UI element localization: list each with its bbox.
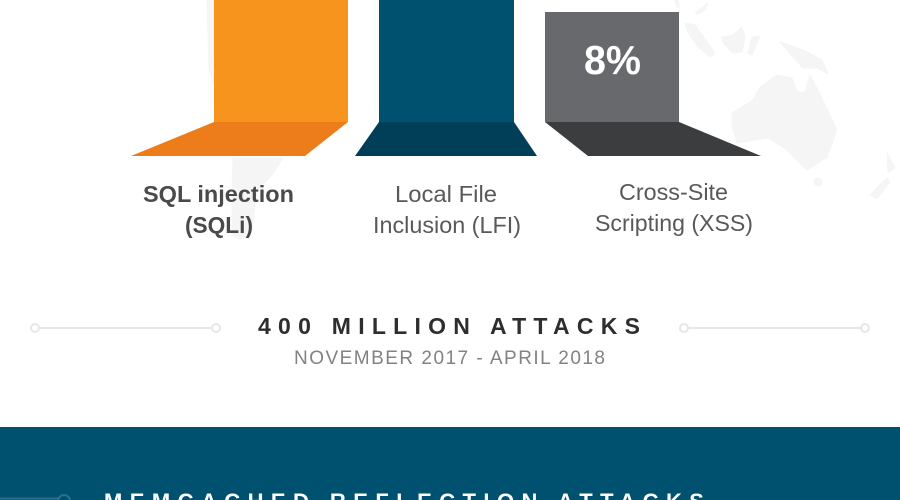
bar: Local File Inclusion [355,0,537,156]
label: Local File Inclusion: Inclusion (LFI) [373,212,521,238]
value: 8%: 8% [584,37,641,83]
heading: 400 million attacks: 400 MILLION ATTACKS [258,313,640,339]
connector icon [0,495,70,500]
background world map [207,0,895,240]
panel background [0,427,900,500]
panel: memcached section [0,427,900,500]
label: Cross-Site Scripting: Cross-Site [619,179,728,205]
label: Local File Inclusion: Local File [395,181,497,207]
label: SQL injection: SQL injection [143,181,294,207]
divider: right [680,324,869,332]
date range: NOVEMBER 2017 - APRIL 2018 [294,348,605,369]
bar face: SQL injection [214,0,348,122]
label: SQL injection: (SQLi) [185,212,253,238]
label: Local File Inclusion [373,181,521,238]
label: SQL injection [143,181,294,238]
label: Cross-Site Scripting [595,179,753,236]
divider: left [31,324,220,332]
label: Cross-Site Scripting: Scripting (XSS) [595,210,753,236]
bar floor: Local File Inclusion [355,122,537,156]
bar floor: SQL injection [131,122,348,156]
bar face: Cross-Site Scripting [545,12,679,122]
bar floor: Cross-Site Scripting [545,122,761,156]
bar face: Local File Inclusion [379,0,514,122]
bar: SQL injection [131,0,348,156]
bar: Cross-Site Scripting [545,12,761,156]
